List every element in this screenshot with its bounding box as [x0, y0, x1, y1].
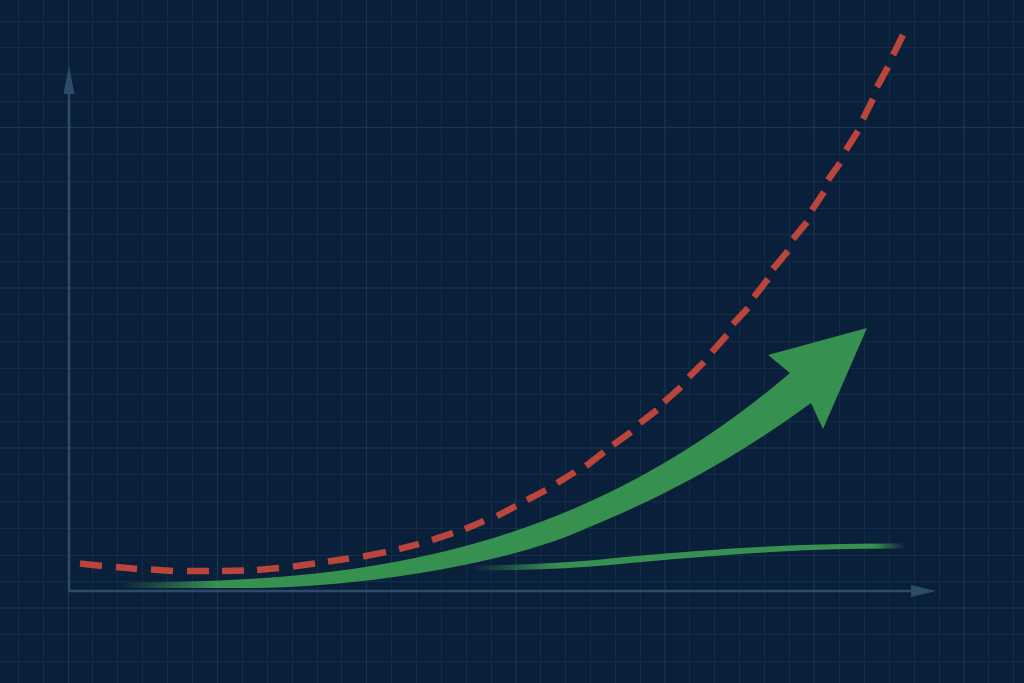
thin green flat-growth line: [470, 544, 905, 570]
y axis arrow: [64, 66, 74, 591]
x axis arrow: [68, 585, 936, 597]
green growth arrow: [105, 328, 867, 588]
red dashed projection curve: [80, 35, 903, 571]
